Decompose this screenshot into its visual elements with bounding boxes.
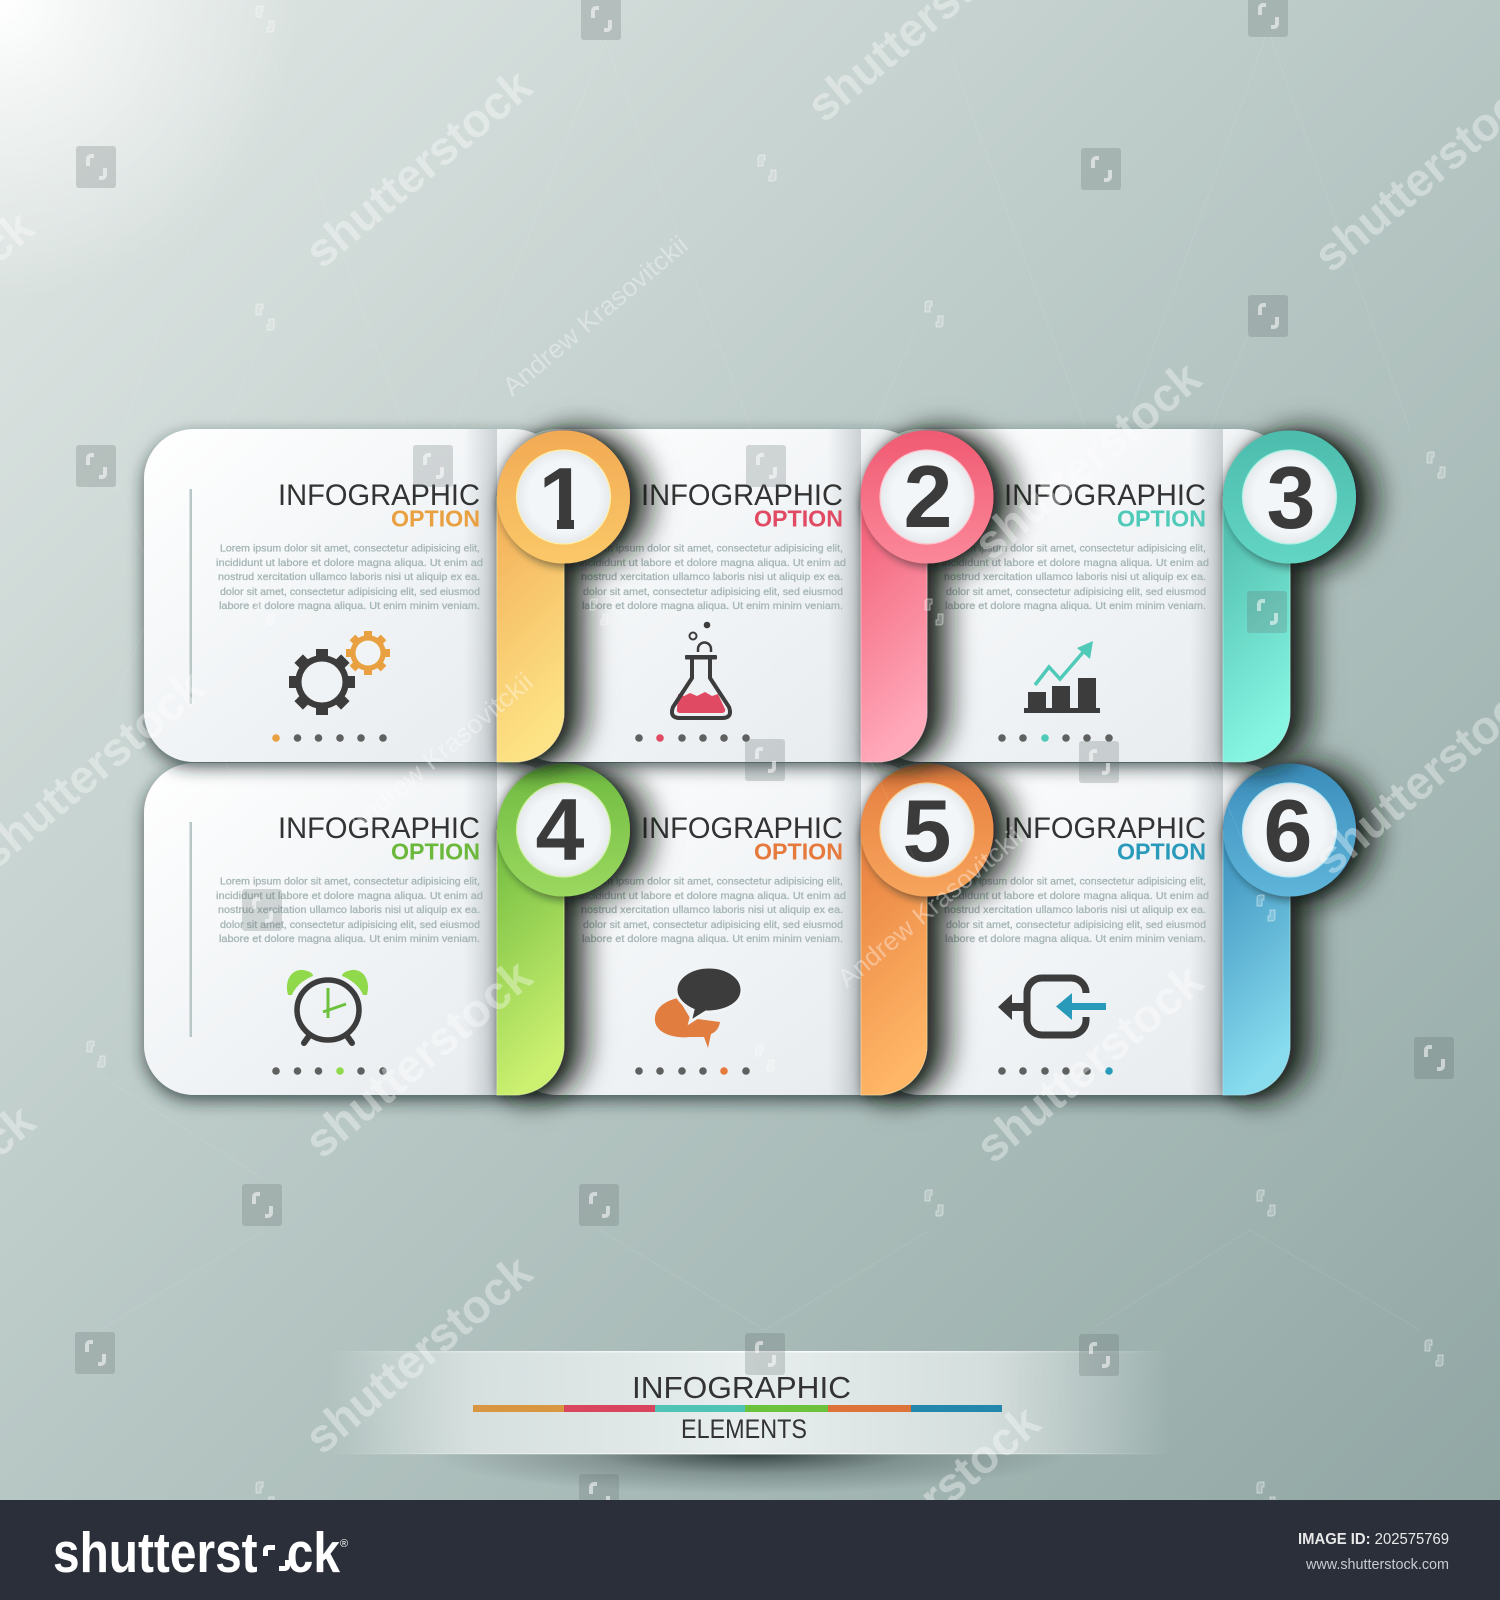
- body text: option 3: [942, 542, 1209, 612]
- body text: option 4: incididunt ut labore et dolore magna aliqua. Ut enim ad: [216, 890, 483, 902]
- panel: option 1 card: [144, 429, 564, 762]
- body text: option 2: incididunt ut labore et dolore magna aliqua. Ut enim ad: [579, 557, 846, 569]
- heading: option 2: INFOGRAPHIC: [641, 479, 843, 512]
- body text: option 6: labore et dolore magna aliqua. Ut enim minim veniam.: [945, 933, 1206, 945]
- watermark: author name: Andrew Krasovitckii: [342, 666, 539, 839]
- colour bar: [473, 1405, 1002, 1412]
- ribbon 5: [860, 764, 994, 1095]
- panel: option 4 card: [144, 763, 564, 1095]
- title: elements: ELEMENTS: [681, 1414, 807, 1444]
- number 6: 6: [1264, 781, 1312, 880]
- panel: option 3 card: [870, 429, 1289, 762]
- heading: option 1: INFOGRAPHIC: [278, 479, 480, 512]
- body text: option 1: labore et dolore magna aliqua. Ut enim minim veniam.: [219, 600, 480, 612]
- pagination dots: option 2: [635, 734, 750, 742]
- body text: option 3: Lorem ipsum dolor sit amet, consectetur adipisicing elit,: [946, 542, 1206, 554]
- body text: option 5: Lorem ipsum dolor sit amet, consectetur adipisicing elit,: [583, 876, 843, 888]
- icon: alarm clock: [287, 970, 368, 1043]
- body text: option 4: dolor sit amet, consectetur adipisicing elit, sed eiusmod: [220, 919, 480, 931]
- title: infographic: INFOGRAPHIC: [632, 1370, 851, 1405]
- body text: option 5: incididunt ut labore et dolore magna aliqua. Ut enim ad: [579, 890, 846, 902]
- watermark: author name: Andrew Krasovitckii: [497, 229, 694, 402]
- heading: option 3: INFOGRAPHIC: [1004, 479, 1206, 512]
- panel: bottom title plate: [330, 1351, 1170, 1534]
- watermark: shutterstock: shutterstock: [963, 350, 1211, 570]
- icon: gears: [289, 631, 390, 715]
- heading: option 5: INFOGRAPHIC: [641, 812, 843, 845]
- body text: option 5: nostrud xercitation ullamco laboris nisi ut aliquip ex ea.: [581, 904, 843, 916]
- body text: option 6: incididunt ut labore et dolore magna aliqua. Ut enim ad: [942, 890, 1209, 902]
- body text: option 2: [579, 542, 846, 612]
- ribbon 6: [1223, 764, 1356, 1095]
- icon: exit arrows: [998, 978, 1106, 1035]
- body text: option 3: incididunt ut labore et dolore magna aliqua. Ut enim ad: [942, 557, 1209, 569]
- pagination dots: option 1: [272, 734, 387, 742]
- subheading: option 4: OPTION: [391, 838, 480, 864]
- number 2: 2: [904, 447, 952, 546]
- watermark: shutterstock: shutterstock: [965, 953, 1213, 1173]
- image id: IMAGE ID: 202575769: [1298, 1531, 1449, 1548]
- body text: option 5: [579, 876, 846, 945]
- number 5: 5: [903, 781, 951, 880]
- logo: shutterstock: ®: [340, 1538, 348, 1550]
- body text: option 4: [216, 876, 483, 945]
- divider line: option 4: [190, 822, 192, 1037]
- panel: option 2 card: [507, 429, 927, 762]
- icon: flask: [672, 622, 730, 718]
- number 3: 3: [1267, 448, 1315, 547]
- panel: option 5 card: [507, 763, 927, 1095]
- subheading: option 2: OPTION: [754, 506, 843, 532]
- body text: option 2: Lorem ipsum dolor sit amet, consectetur adipisicing elit,: [583, 542, 843, 554]
- watermark lines: [100, 30, 1420, 1330]
- watermark: author name: [342, 229, 1029, 994]
- footer bar: [0, 1500, 1500, 1600]
- heading: option 6: INFOGRAPHIC: [1004, 812, 1206, 845]
- pagination dots: option 4: [272, 1067, 387, 1075]
- divider line: option 1: [190, 489, 192, 704]
- panel: option 6 card: [870, 763, 1289, 1095]
- ribbon 4: [497, 764, 630, 1095]
- body text: option 3: dolor sit amet, consectetur adipisicing elit, sed eiusmod: [946, 586, 1206, 598]
- body text: option 2: labore et dolore magna aliqua. Ut enim minim veniam.: [582, 600, 843, 612]
- ribbon 3: [1223, 430, 1356, 762]
- body text: option 5: labore et dolore magna aliqua. Ut enim minim veniam.: [582, 933, 843, 945]
- ribbon 1: [497, 430, 630, 762]
- body text: option 4: labore et dolore magna aliqua. Ut enim minim veniam.: [219, 933, 480, 945]
- body text: option 3: labore et dolore magna aliqua. Ut enim minim veniam.: [945, 600, 1206, 612]
- body text: option 3: nostrud xercitation ullamco laboris nisi ut aliquip ex ea.: [944, 571, 1206, 583]
- subheading: option 5: OPTION: [754, 838, 843, 864]
- icon: bar chart with arrow: [1024, 641, 1100, 713]
- pagination dots: option 6: [998, 1067, 1113, 1075]
- body text: option 1: dolor sit amet, consectetur adipisicing elit, sed eiusmod: [220, 586, 480, 598]
- pagination dots: option 3: [998, 734, 1113, 742]
- subheading: option 3: OPTION: [1117, 506, 1206, 532]
- heading: option 4: INFOGRAPHIC: [278, 812, 480, 845]
- body text: option 1: [216, 542, 483, 612]
- body text: option 6: Lorem ipsum dolor sit amet, consectetur adipisicing elit,: [946, 876, 1206, 888]
- body text: option 1: Lorem ipsum dolor sit amet, consectetur adipisicing elit,: [220, 542, 480, 554]
- pagination dots: option 5: [635, 1067, 750, 1075]
- body text: option 5: dolor sit amet, consectetur adipisicing elit, sed eiusmod: [583, 919, 843, 931]
- watermark: shutterstock: shutterstock: [294, 948, 542, 1168]
- body text: option 6: [942, 876, 1209, 945]
- number 4: 4: [536, 780, 585, 879]
- ribbon 2: [860, 430, 994, 762]
- body text: option 6: dolor sit amet, consectetur adipisicing elit, sed eiusmod: [946, 919, 1206, 931]
- body text: option 2: dolor sit amet, consectetur adipisicing elit, sed eiusmod: [583, 586, 843, 598]
- number 1: 1: [539, 449, 587, 548]
- website: www.shutterstock.com: [1305, 1556, 1449, 1573]
- logo: shutterstock: shutterstock: [53, 1521, 340, 1585]
- body text: option 6: nostrud xercitation ullamco laboris nisi ut aliquip ex ea.: [944, 904, 1206, 916]
- body text: option 1: incididunt ut labore et dolore magna aliqua. Ut enim ad: [216, 557, 483, 569]
- watermark: author name: Andrew Krasovitckii: [832, 821, 1029, 994]
- watermark: shutterstock: shutterstock: [294, 58, 542, 278]
- subheading: option 1: OPTION: [391, 506, 480, 532]
- icon: speech bubbles: [655, 967, 742, 1048]
- body text: option 4: Lorem ipsum dolor sit amet, consectetur adipisicing elit,: [220, 876, 480, 888]
- body text: option 4: nostrud xercitation ullamco laboris nisi ut aliquip ex ea.: [218, 904, 480, 916]
- body text: option 2: nostrud xercitation ullamco laboris nisi ut aliquip ex ea.: [581, 571, 843, 583]
- subheading: option 6: OPTION: [1117, 838, 1206, 864]
- watermark: shutterstock: shutterstock: [294, 1244, 542, 1464]
- body text: option 1: nostrud xercitation ullamco laboris nisi ut aliquip ex ea.: [218, 571, 480, 583]
